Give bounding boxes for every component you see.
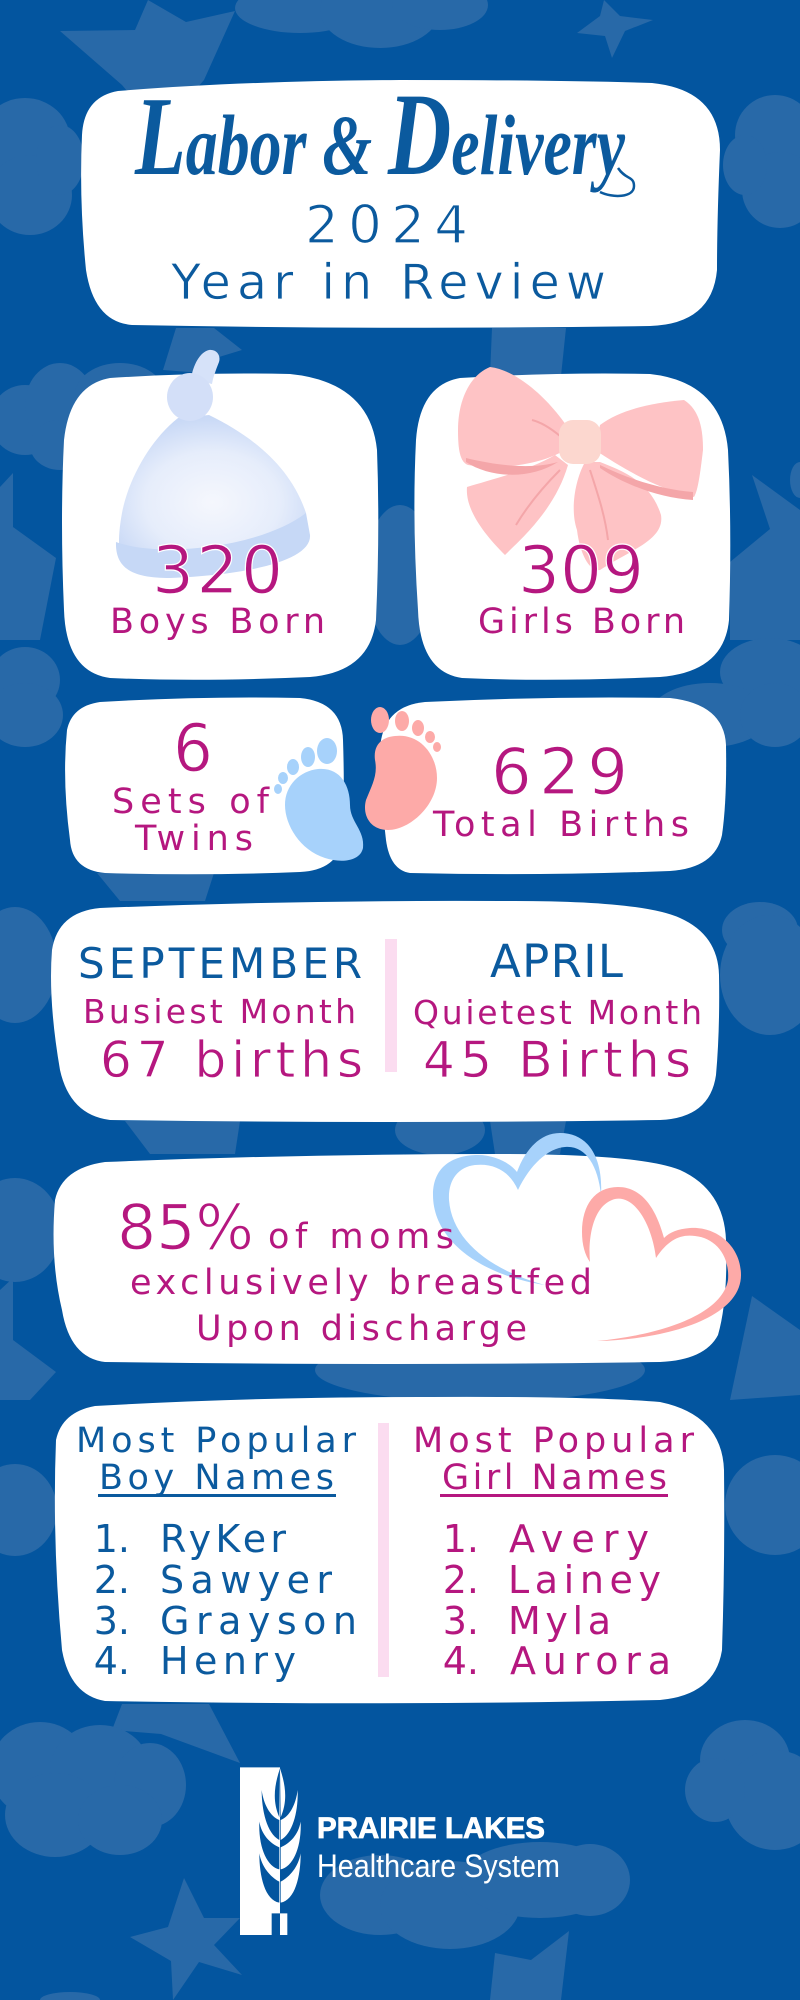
text: Healthcare System: Healthcare System bbox=[317, 1848, 560, 1884]
text: September busiest month bbox=[78, 939, 363, 1089]
text: girl names heading: Most Popular bbox=[413, 1421, 695, 1461]
text: September busiest month: 67 births bbox=[100, 1031, 363, 1089]
panel: busiest and quietest months bbox=[51, 901, 719, 1122]
heading: Year in Review: Year in Review bbox=[170, 254, 606, 311]
text: boy names heading: Most Popular bbox=[76, 1421, 357, 1461]
icon: pink heart bbox=[582, 1187, 741, 1341]
stat: 629: 629 bbox=[491, 736, 628, 810]
label: Boys Born: Boys Born bbox=[110, 602, 325, 642]
label: Girls Born: Girls Born bbox=[478, 602, 685, 642]
divider bbox=[385, 939, 397, 1072]
icon: blue footprint bbox=[274, 738, 363, 861]
list: girl names: Aurora bbox=[510, 1639, 671, 1683]
list: girl names: 2. bbox=[443, 1558, 479, 1602]
text: April quietest month: APRIL bbox=[490, 935, 623, 988]
stat: 6: 6 bbox=[173, 710, 213, 787]
list: girl names: 4. bbox=[443, 1639, 479, 1683]
text: April quietest month: Quietest Month bbox=[413, 993, 702, 1032]
panel: twins bbox=[65, 698, 344, 874]
list: boy names: 1. bbox=[94, 1517, 130, 1561]
panel: title bbox=[81, 69, 720, 328]
list: boy names: Sawyer bbox=[160, 1558, 332, 1602]
list: girl names: Myla bbox=[508, 1599, 611, 1643]
panel: boys born bbox=[62, 350, 378, 680]
text: boy names heading: Boy Names bbox=[99, 1458, 334, 1498]
panel: breastfeeding bbox=[54, 1133, 741, 1364]
heading: 2024: 2024 bbox=[305, 195, 468, 256]
list: boy names: RyKer bbox=[160, 1517, 286, 1561]
list: boy names: Henry bbox=[160, 1639, 296, 1683]
divider bbox=[378, 1423, 389, 1677]
icon: baby hat bbox=[116, 350, 310, 578]
panel: total births bbox=[380, 698, 726, 874]
stat: 309: 309 bbox=[518, 532, 644, 609]
text: Prairie Lakes: PRAIRIE LAKES bbox=[317, 1812, 545, 1845]
text: September busiest month: SEPTEMBER bbox=[78, 939, 362, 988]
label: Sets of Twins: Sets of bbox=[112, 782, 270, 822]
text: girl names heading bbox=[413, 1421, 695, 1498]
icon: blue heart bbox=[433, 1133, 601, 1285]
text: April quietest month bbox=[413, 935, 702, 1089]
text: boy names heading bbox=[76, 1421, 357, 1498]
label: Sets of Twins bbox=[112, 782, 270, 859]
stat: 85%: 85% bbox=[117, 1191, 254, 1264]
text: of moms exclusively breastfed upon discharge: Upon discharge bbox=[196, 1309, 527, 1349]
text: girl names heading: Girl Names bbox=[442, 1458, 667, 1498]
stat: 320: 320 bbox=[152, 532, 283, 609]
heading: Labor & Delivery: Labor & Delivery bbox=[134, 69, 626, 200]
list: girl names bbox=[443, 1517, 671, 1683]
panel: girls born bbox=[414, 367, 730, 680]
label: Total Births: Total Births bbox=[432, 805, 689, 845]
logo: Prairie Lakes Healthcare System bbox=[240, 1767, 560, 1935]
list: boy names: 4. bbox=[94, 1639, 130, 1683]
panel: popular names bbox=[55, 1397, 724, 1703]
list: boy names: 2. bbox=[94, 1558, 130, 1602]
list: boy names bbox=[94, 1517, 357, 1683]
decorative y swash bbox=[600, 168, 634, 196]
list: boy names: 3. bbox=[94, 1599, 130, 1643]
text: of moms exclusively breastfed upon discharge: exclusively breastfed bbox=[130, 1263, 592, 1303]
text: September busiest month: Busiest Month bbox=[83, 992, 356, 1031]
list: girl names: 3. bbox=[443, 1599, 479, 1643]
icon: pink footprint bbox=[365, 707, 441, 830]
text: April quietest month: 45 Births bbox=[423, 1031, 691, 1089]
icon: pink bow bbox=[458, 367, 703, 570]
label: Sets of Twins: Twins bbox=[134, 819, 253, 859]
icon: wheat mark bbox=[240, 1767, 301, 1935]
list: boy names: Grayson bbox=[160, 1599, 357, 1643]
list: girl names: Avery bbox=[509, 1517, 649, 1561]
list: girl names: 1. bbox=[443, 1517, 479, 1561]
text: of moms exclusively breastfed upon discharge: of moms bbox=[268, 1217, 454, 1257]
list: girl names: Lainey bbox=[508, 1558, 661, 1602]
text: of moms exclusively breastfed upon discharge bbox=[130, 1217, 592, 1349]
